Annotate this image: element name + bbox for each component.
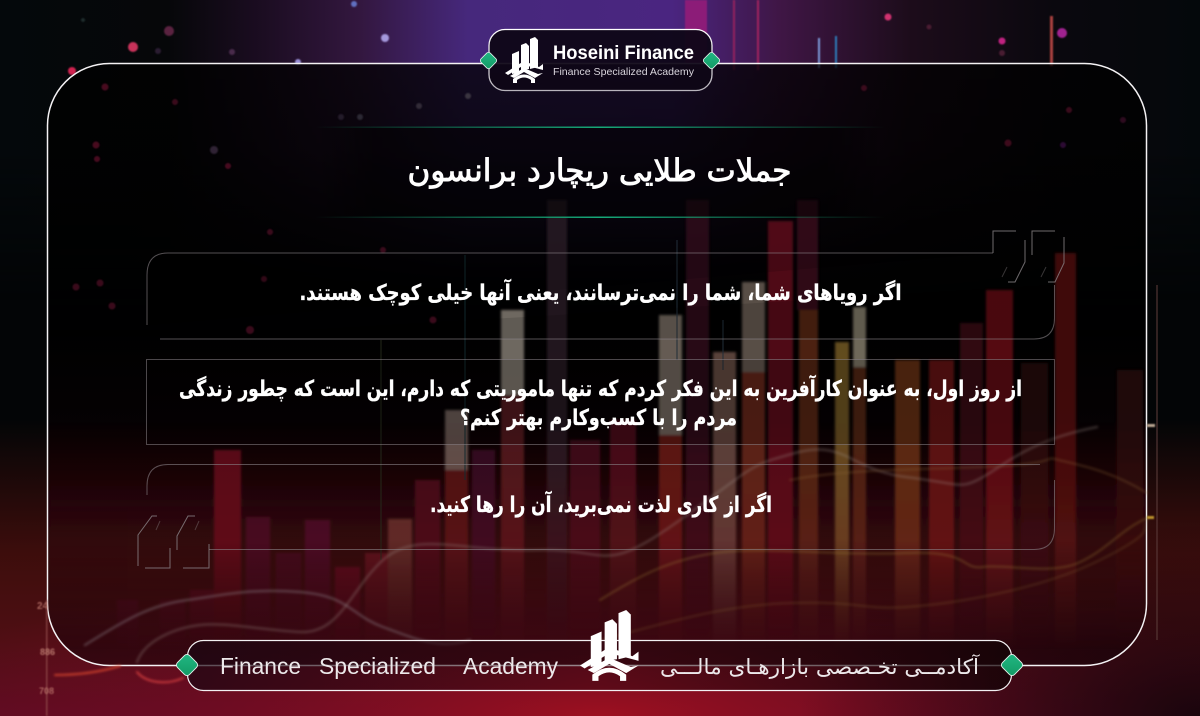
top logo badge: [479, 30, 721, 90]
candlestick bar chart backdrop: [48, 200, 1146, 660]
main panel: [48, 64, 1146, 666]
icon: diamond left: [175, 653, 199, 677]
icon: diamond right: [1000, 653, 1024, 677]
english slogan: Finance: [220, 653, 301, 679]
quote card 2: [146, 360, 1054, 444]
card 2 text: مردم را با کسب‌وکارم بهتر کنم؟: [460, 406, 737, 431]
icon: academy logo: [505, 37, 543, 83]
card 1 text: اگر رویاهای شما، شما را نمی‌ترسانند، یعنی آنها خیلی کوچک هستند.: [300, 278, 902, 306]
left axis labels: 886: [40, 647, 55, 657]
icon: closing quote mark top right: [993, 231, 1064, 282]
icon: academy logo large: [580, 610, 639, 681]
magenta and red upper bars: [547, 200, 1143, 653]
icon: diamond left: [479, 51, 498, 70]
persian slogan: آکادمــی تخـصصی بازارهـای مالـــی: [660, 654, 980, 679]
left axis labels: [37, 600, 55, 716]
panel particles: [72, 84, 1126, 334]
heading: جملات طلایی ریچارد برانسون: [408, 153, 792, 189]
english slogan: Specialized: [319, 653, 436, 679]
brand tagline: Finance Specialized Academy: [553, 66, 695, 78]
right axis ticks: [1147, 285, 1158, 640]
wave lines: [55, 427, 1147, 682]
background particles: [68, 1, 1067, 75]
icon: diamond right: [702, 51, 721, 70]
english slogan: Academy: [463, 653, 558, 679]
quote card 1: [147, 253, 1054, 339]
card 3 text: اگر از کاری لذت نمی‌برید، آن را رها کنید.: [430, 490, 772, 518]
thin wick lines: [380, 240, 724, 560]
quote card 3: [147, 464, 1054, 550]
bottom banner: [175, 610, 1024, 690]
pale bars: [445, 282, 866, 652]
left axis labels: 24: [37, 601, 49, 612]
english slogan: [220, 653, 558, 679]
left axis labels: 708: [39, 686, 54, 696]
title box: [315, 126, 885, 218]
icon: opening quote mark bottom left: [138, 516, 209, 568]
brand name: Hoseini Finance: [553, 42, 694, 64]
background vertical light lines: [685, 0, 1053, 70]
card 2 text: [179, 374, 1022, 431]
lower left bars: [190, 419, 638, 617]
